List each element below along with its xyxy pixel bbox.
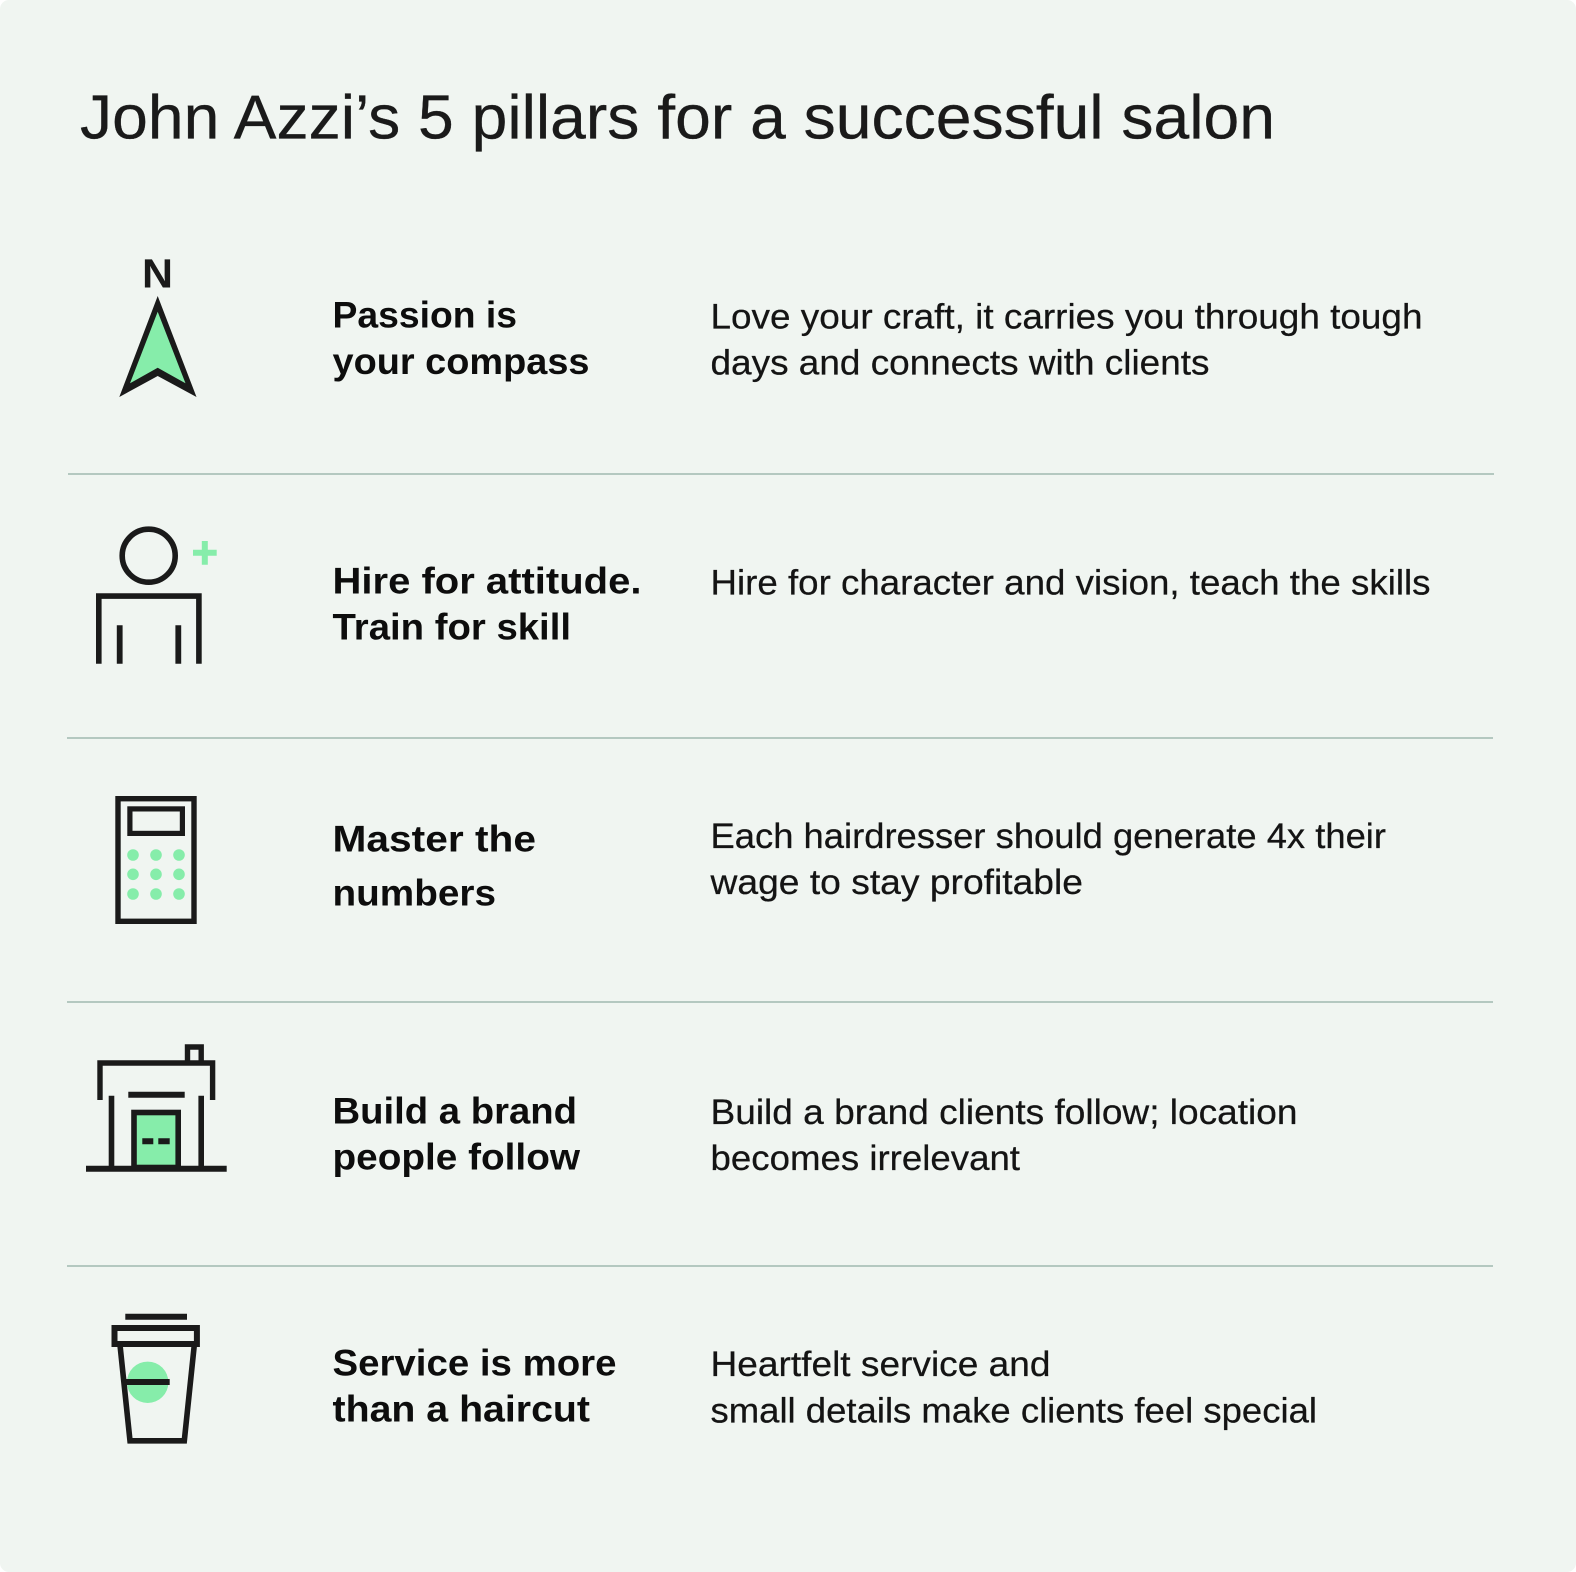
- description: passion: Love your craft, it carries you through tough: [710, 296, 1422, 336]
- description: service: Heartfelt service and: [710, 1344, 1050, 1384]
- description: numbers: Each hairdresser should generate 4x their: [710, 816, 1386, 856]
- icon: calculator: [118, 799, 194, 921]
- description: passion: days and connects with clients: [710, 342, 1210, 382]
- heading: service: than a haircut: [332, 1388, 591, 1430]
- icon: person with plus: [99, 529, 217, 664]
- icon: salon building: [86, 1047, 227, 1169]
- icon: north compass arrow: [119, 250, 196, 397]
- title: John Azzi’s 5 pillars for a successful salon: [80, 84, 1275, 152]
- icon: north compass arrow: N: [142, 250, 173, 296]
- description: brand: [710, 1092, 1298, 1178]
- row: build a brand: [86, 1047, 1298, 1178]
- heading: hire: Train for skill: [332, 606, 571, 648]
- heading: service: [332, 1342, 616, 1430]
- heading: brand: [332, 1090, 581, 1178]
- description: brand: Build a brand clients follow; location: [710, 1092, 1298, 1132]
- heading: passion: [332, 294, 590, 382]
- heading: passion: Passion is: [332, 294, 517, 336]
- heading: brand: people follow: [332, 1136, 581, 1178]
- heading: service: Service is more: [332, 1342, 616, 1384]
- description: passion: [710, 296, 1422, 382]
- description: numbers: wage to stay profitable: [709, 862, 1083, 902]
- heading: numbers: Master the: [332, 818, 536, 860]
- description: numbers: [709, 816, 1386, 902]
- heading: brand: Build a brand: [332, 1090, 577, 1132]
- row: passion is your compass: [119, 250, 1422, 397]
- heading: passion: your compass: [332, 340, 590, 382]
- heading: hire: Hire for attitude.: [332, 560, 642, 602]
- heading: numbers: [332, 818, 536, 914]
- heading: hire: [332, 560, 642, 648]
- icon: takeaway cup: [114, 1317, 197, 1441]
- description: brand: becomes irrelevant: [710, 1138, 1020, 1178]
- row: master the numbers: [118, 799, 1386, 921]
- description: hire: Hire for character and vision, teach the skills: [710, 562, 1430, 602]
- description: service: [710, 1344, 1317, 1431]
- row: hire for attitude: [99, 529, 1430, 664]
- description: service: small details make clients feel special: [710, 1391, 1317, 1431]
- heading: numbers: numbers: [332, 872, 496, 914]
- row: service: [114, 1317, 1317, 1441]
